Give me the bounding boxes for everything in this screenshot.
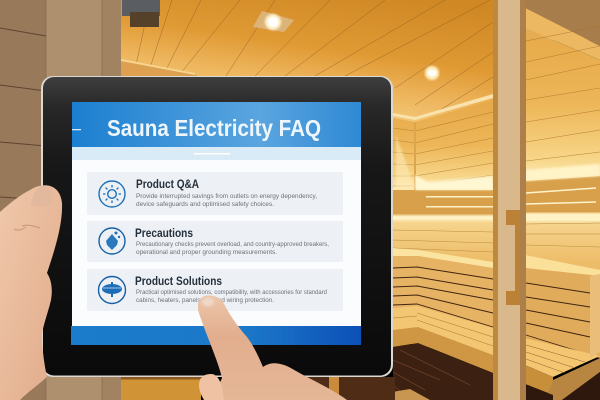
description: Provide interrupted savings from outlets on energy dependency, [136,193,317,200]
card: Product Solutions [87,269,343,311]
description [136,289,327,304]
card: Precautions [87,221,343,262]
description: Practical optimised solutions, compatibility, with accessories for standard [136,289,327,296]
icon: sun gear [99,181,125,207]
thumbnail [31,186,53,206]
tablet body [41,76,393,377]
heading: Precautions [135,228,193,240]
description: device safeguards and optimised safety choices. [136,201,274,208]
heading: Product Q&A [136,179,199,191]
description: operational and proper grounding measurements. [136,249,277,256]
right hand lower knuckle [199,374,224,400]
tablet [41,76,393,377]
icon: droplet diamond [99,228,125,254]
right hand pointing finger [198,295,347,400]
card: Product Q&A [87,172,343,215]
background: dark floor [121,343,600,400]
description [136,193,317,208]
title: Sauna Electricity FAQ [107,115,321,141]
background: glass door frame with handle [493,0,526,400]
description: Precautionary checks prevent overload, and country-approved breakers, [136,241,329,248]
tablet screen [71,102,361,345]
background: sauna right wall past door [523,0,600,280]
left hand thumb [0,185,62,400]
fingertip highlight [202,298,214,306]
description [136,241,329,256]
background: wooden wall left [0,0,122,400]
description: cabins, heaters, panels and and wiring protection. [136,297,274,304]
background: sauna back walls [391,94,495,270]
ceiling spotlight 1 [253,11,294,32]
thumb crease [14,225,40,230]
screen header [72,102,361,148]
background: sauna ceiling [121,0,496,125]
background: sauna benches [393,256,600,400]
screen footer bar [71,326,361,345]
icon: disc [98,276,126,304]
door handle [506,210,520,305]
ceiling camera fixture [122,0,160,27]
ceiling spotlight 2 [425,66,439,80]
heading: Product Solutions [135,276,222,288]
